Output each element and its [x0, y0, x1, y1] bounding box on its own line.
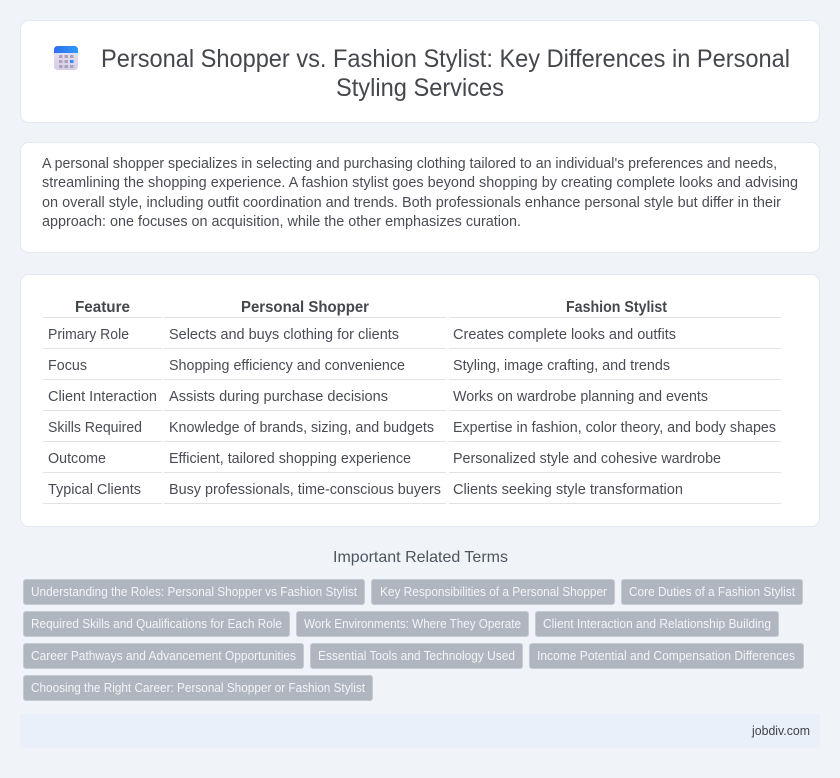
- tag: Career Pathways and Advancement Opportunities: [31, 648, 296, 663]
- row: typical clients: Typical Clients: [48, 481, 141, 498]
- text block: introduction paragraph: streamlining the shopping experience. A fashion stylist goes beyond shopping by creating complete looks and advising: [42, 174, 798, 191]
- row: client interaction: Works on wardrobe planning and events: [453, 388, 708, 405]
- tag: Choosing the Right Career: Personal Shopper or Fashion Stylist: [31, 680, 365, 695]
- panel: comparison table: [20, 274, 820, 526]
- text block: introduction paragraph: on overall style, including outfit coordination and trends. Both professionals enhance personal style but differ in their: [42, 194, 781, 211]
- row: typical clients: Clients seeking style transformation: [453, 481, 683, 498]
- tag: [372, 580, 614, 604]
- tag: Required Skills and Qualifications for Each Role: [31, 616, 282, 631]
- text block: introduction paragraph: A personal shopper specializes in selecting and purchasing clothing tailored to an individual's preferences and needs,: [42, 155, 777, 172]
- row: typical clients: [48, 481, 683, 498]
- row: outcome: [48, 450, 721, 467]
- row: typical clients: Busy professionals, time-conscious buyers: [169, 481, 441, 498]
- tag: [622, 580, 802, 604]
- row: client interaction: [48, 388, 708, 405]
- tag: [24, 676, 372, 700]
- row: outcome: Personalized style and cohesive wardrobe: [453, 450, 721, 467]
- row: focus: [48, 357, 670, 374]
- heading: important related terms: Important Related Terms: [333, 549, 508, 566]
- title: [101, 45, 790, 102]
- row: primary role: Creates complete looks and outfits: [453, 326, 676, 343]
- row: primary role: Primary Role: [48, 326, 129, 343]
- tag: [296, 612, 528, 636]
- text block: introduction paragraph: approach: one focuses on acquisition, while the other emphasizes curation.: [42, 213, 521, 230]
- tag: [24, 580, 364, 604]
- tags: related terms: [24, 580, 804, 700]
- tag: Core Duties of a Fashion Stylist: [629, 584, 795, 599]
- icon: calendar: [54, 46, 78, 70]
- row: primary role: Selects and buys clothing for clients: [169, 326, 399, 343]
- panel: title card: [20, 20, 820, 122]
- row: skills required: [48, 419, 776, 436]
- tag: [310, 644, 522, 668]
- tag: Essential Tools and Technology Used: [318, 648, 515, 663]
- tag: [24, 612, 290, 636]
- row: outcome: Efficient, tailored shopping experience: [169, 450, 411, 467]
- title: Styling Services: [336, 74, 504, 102]
- row: client interaction: Client Interaction: [48, 388, 157, 405]
- tag: [530, 644, 804, 668]
- row: focus: Styling, image crafting, and trends: [453, 357, 670, 374]
- row: skills required: Knowledge of brands, sizing, and budgets: [169, 419, 434, 436]
- footer: site name: jobdiv.com: [751, 723, 810, 738]
- table header: Fashion Stylist: [566, 299, 668, 316]
- row: primary role: [48, 326, 676, 343]
- table header: Feature: [75, 299, 130, 316]
- tag: Client Interaction and Relationship Building: [543, 616, 771, 631]
- tag: Key Responsibilities of a Personal Shopper: [380, 584, 608, 599]
- table header: Personal Shopper: [241, 299, 369, 316]
- text block: introduction paragraph: [42, 155, 798, 230]
- row: client interaction: Assists during purchase decisions: [169, 388, 388, 405]
- footer bar: [20, 714, 820, 748]
- tag: Income Potential and Compensation Differences: [537, 648, 795, 663]
- tag: [24, 644, 304, 668]
- tag: Understanding the Roles: Personal Shopper vs Fashion Stylist: [31, 584, 357, 599]
- tag: [536, 612, 778, 636]
- row: focus: Shopping efficiency and convenience: [169, 357, 405, 374]
- row: focus: Focus: [48, 357, 87, 374]
- tag: Work Environments: Where They Operate: [304, 616, 521, 631]
- row: outcome: Outcome: [48, 450, 106, 467]
- panel: introduction: [20, 142, 820, 252]
- table header: [75, 299, 668, 316]
- row: skills required: Skills Required: [48, 419, 142, 436]
- title: Personal Shopper vs. Fashion Stylist: Key Differences in Personal: [101, 45, 790, 73]
- row: skills required: Expertise in fashion, color theory, and body shapes: [453, 419, 776, 436]
